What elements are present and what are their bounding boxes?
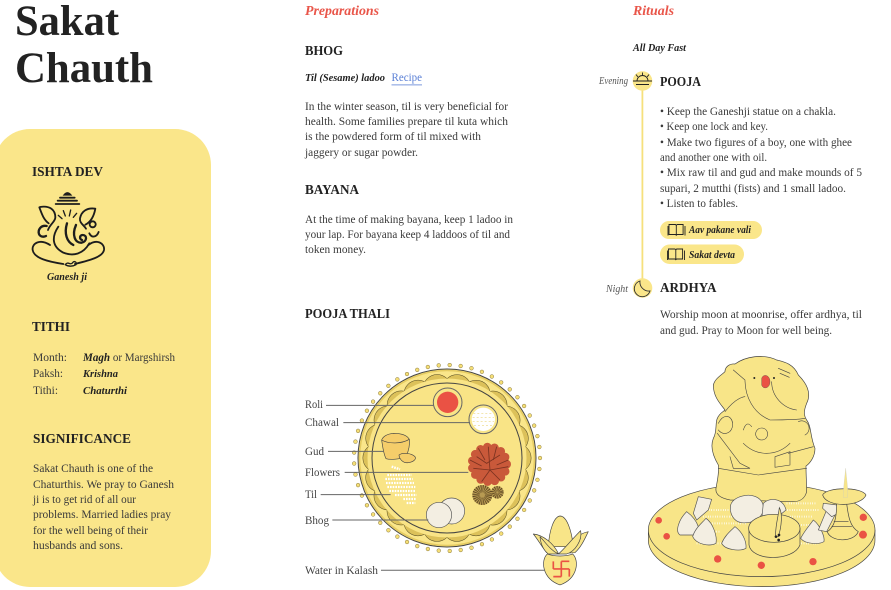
pooja list: • Keep the Ganeshji statue on a chakla. (660, 104, 836, 118)
tithi details: Tithi: (33, 383, 58, 397)
tithi details: Krishna (82, 368, 118, 380)
bhog text: is the powdered form of til mixed with (305, 129, 481, 143)
til scatter (697, 465, 820, 543)
label: evening: Evening (598, 76, 628, 87)
tithi details: Magh or Margshirsh (82, 350, 175, 364)
title: Chauth (15, 45, 153, 92)
bhog subtitle: Til (Sesame) ladoo (305, 72, 385, 84)
callout labels: Bhog (305, 515, 329, 527)
gud (382, 433, 415, 463)
flowers (470, 447, 508, 505)
tithi details (33, 350, 175, 397)
icon: ganesh (33, 192, 104, 266)
bhog text: jaggery or sugar powder. (304, 145, 418, 159)
pooja list: • Make two figures of a boy, one with ghee (660, 135, 852, 149)
bayana text: your lap. For bayana keep 4 laddoos of til and (305, 227, 510, 241)
heading: ishta dev: ISHTA DEV (32, 165, 103, 180)
callout labels: Water in Kalash (305, 565, 378, 577)
heading: bhog: BHOG (305, 44, 343, 59)
bhog text: In the winter season, til is very beneficial for (305, 99, 508, 113)
tithi details: Paksh: (33, 366, 63, 380)
statue (712, 356, 815, 502)
callout labels: Chawal (305, 417, 339, 429)
heading: rituals: Rituals (632, 4, 675, 19)
heading: ardhya: ARDHYA (660, 281, 717, 296)
panel: sidebar (0, 129, 211, 587)
heading: preparations: Preparations (305, 4, 380, 19)
significance text: for the well being of their (33, 523, 148, 537)
sweets (678, 495, 838, 550)
pooja list: supari, 2 mutthi (fists) and 1 small ladoo. (660, 181, 846, 195)
thali plate (354, 365, 540, 551)
bhog subtitle (305, 70, 422, 85)
heading: tithi: TITHI (32, 320, 70, 335)
kalash (533, 516, 588, 585)
subheading: all day fast: All Day Fast (632, 42, 687, 54)
label: night: Night (605, 284, 629, 295)
pooja list: • Mix raw til and gud and make mounds of 5 (660, 165, 862, 179)
callout labels: Til (305, 489, 317, 501)
significance text: Chaturthis. We pray to Ganesh (33, 477, 174, 491)
significance text: Sakat Chauth is one of the (33, 461, 153, 475)
bhog text (304, 99, 508, 159)
lamp stand (823, 468, 866, 540)
significance text (32, 461, 174, 552)
button: sakat devta (660, 244, 744, 264)
icon: evening sun (633, 71, 652, 91)
callout lines (321, 405, 545, 570)
heading: significance: SIGNIFICANCE (33, 432, 131, 447)
heading: pooja: POOJA (660, 75, 702, 90)
pooja list: • Keep one lock and key. (660, 119, 768, 133)
illustration: ganesh statue on plate (648, 356, 875, 587)
red dots (655, 514, 867, 569)
timeline line (642, 88, 643, 280)
bayana text: token money. (305, 242, 366, 256)
pooja list: and another one with oil. (660, 150, 767, 164)
chart: pooja thali diagram (305, 365, 588, 585)
diya (749, 508, 800, 557)
bhog (426, 498, 465, 528)
heading: pooja thali: POOJA THALI (305, 307, 390, 322)
ardhya text: Worship moon at moonrise, offer ardhya, til (660, 307, 863, 321)
callout labels: Roli (305, 399, 323, 411)
pooja list (660, 104, 862, 210)
pooja list: • Listen to fables. (660, 196, 738, 210)
ardhya text (660, 307, 863, 337)
callout labels (305, 399, 378, 577)
significance text: problems. Married ladies pray (33, 507, 171, 521)
significance text: husbands and sons. (33, 538, 123, 552)
heading: bayana: BAYANA (305, 183, 360, 198)
roli (433, 388, 462, 417)
button: aav pakane vali (660, 221, 762, 239)
button: aav pakane vali: Aav pakane vali (688, 225, 751, 236)
bhog subtitle: Recipe (392, 70, 422, 84)
tithi details: Month: (33, 350, 67, 364)
tithi details: Chaturthi (83, 385, 128, 397)
callout labels: Flowers (305, 467, 340, 479)
title (15, 0, 153, 92)
callout labels: Gud (305, 446, 324, 458)
icon: night moon (633, 278, 652, 298)
ardhya text: and gud. Pray to Moon for well being. (660, 323, 832, 337)
plate (648, 483, 875, 587)
thali items (382, 388, 588, 585)
bayana text (305, 212, 513, 256)
bayana text: At the time of making bayana, keep 1 ladoo in (305, 212, 513, 226)
button: sakat devta: Sakat devta (689, 250, 735, 261)
caption: ganesh ji: Ganesh ji (47, 271, 88, 283)
chawal (469, 405, 498, 434)
significance text: ji is to get rid of all our (32, 492, 136, 506)
bhog text: health. Some families prepare til kuta which (305, 114, 508, 128)
til (385, 467, 417, 503)
